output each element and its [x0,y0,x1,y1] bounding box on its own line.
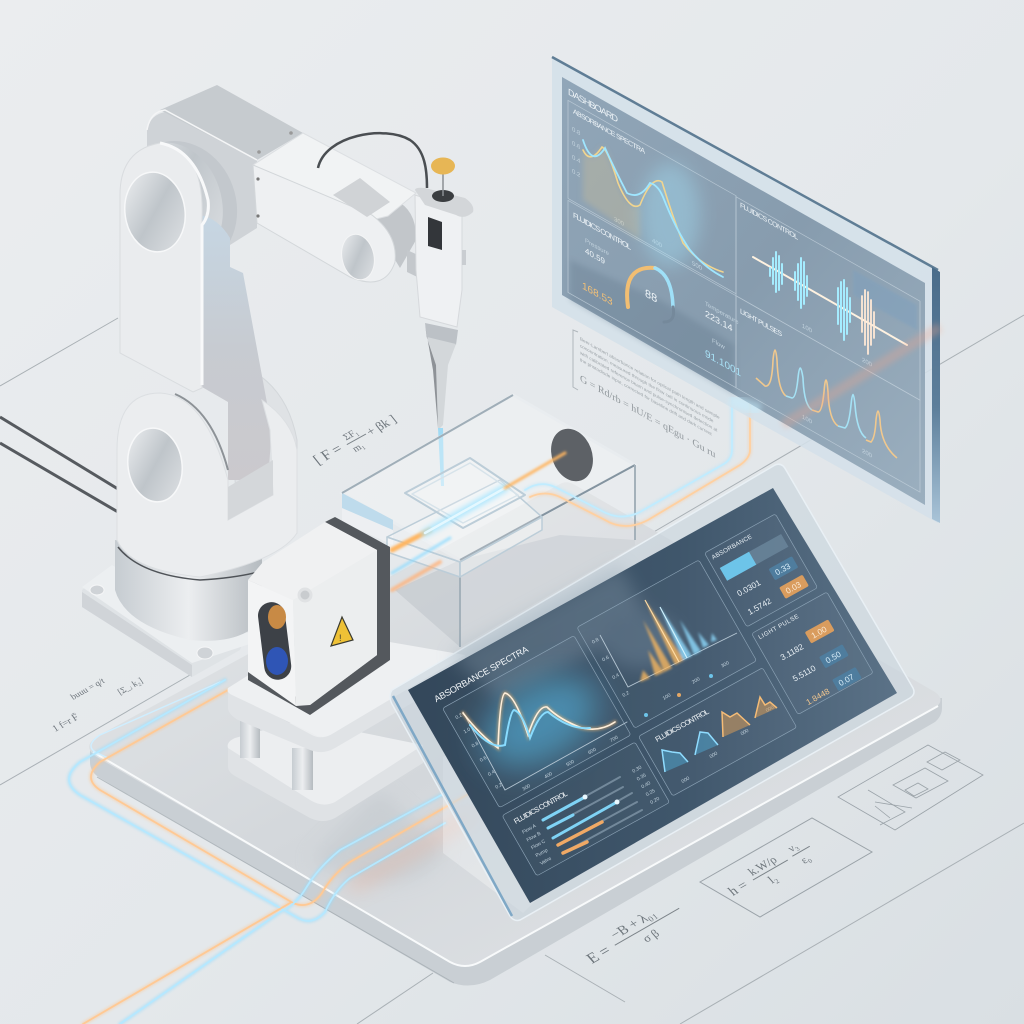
monitor text labels: 500 [692,260,702,273]
text block: floating notes behind monitor: G = Rd/rb = hU/E = qEgu · Gu ru [580,373,716,461]
formula: force equation: ΣF₁ [341,427,361,443]
monitor text labels: 100 [802,414,812,426]
robot joint seam [118,547,258,580]
robot signal cable [318,133,427,188]
robot rear dome [225,360,297,540]
tablet text labels: 000 [740,728,750,737]
formula box: wavelength equation: ν₃ [786,841,801,854]
formula: bottom energy equation: −B + λ₀₁ [608,907,660,942]
text block: floating notes behind monitor: Beer-Lambert absorbance relation for optical path length and sample [580,336,720,421]
cuvette tray [387,458,542,577]
tablet text labels: 0.8 [471,741,480,749]
monitor panel grid [568,100,920,492]
tablet text labels: 0.8 [591,637,600,645]
tablet text labels: Flow A [521,823,538,836]
tablet text labels: 5.5110 [791,664,818,683]
formula: left floor notes: 1 f=r F̄ [50,711,81,734]
blue inlet channel [120,793,445,1024]
robot yoke shadow arc [175,394,228,470]
cables to robot [0,417,118,512]
formula: bottom energy equation: σ β [639,927,662,945]
monitor text labels: 0.4 [572,154,581,165]
monitor text labels: 200 [862,357,872,369]
monitor text labels: 91.1001 [705,348,741,379]
base plate [89,482,942,986]
tablet glass frame [390,464,914,920]
tablet plateau charts [662,697,777,772]
formula: bottom energy equation [578,896,690,973]
monitor status box [853,270,917,330]
tablet absorbance chart [463,693,627,790]
monitor signal waveform [753,252,907,354]
robot pedestal cylinder [115,540,262,641]
text block: floating notes behind monitor: concentration, measured through the flow cell in continuous mode [580,343,714,425]
blue corner loop [91,682,220,758]
formula: force equation: + βk ] [363,412,399,439]
channel glows [69,680,470,1024]
text block: floating notes behind monitor: the photodiode input, corrected for baseline drift and dark current [580,357,712,438]
tablet spectrum bars [600,600,737,717]
monitor text labels: 300 [614,216,624,228]
sensor pedestal [228,630,465,821]
monitor glass frame [552,57,938,523]
tablet text labels: LIGHT PULSE [757,613,800,641]
formula: bottom energy equation: E = [583,943,614,967]
monitor absorbance chart [583,140,723,277]
formula: force equation [308,409,404,473]
formula box: wavelength equation: l₂ [765,872,781,886]
tablet text labels: 0.20 [649,796,661,806]
monitor light glow streak [730,327,940,425]
tablet flow sliders [543,777,642,853]
monitor text labels: 400 [652,237,662,250]
sensor right face [293,550,377,706]
tablet text labels: 1.8448 [805,687,832,707]
pipette [407,158,473,486]
tablet text labels: 700 [609,735,620,744]
monitor text labels: 168.53 [582,280,613,308]
formula: left floor notes [50,675,145,734]
light beam through sample [392,453,565,590]
tablet text labels: 0.25 [645,788,657,798]
sensor lens window [256,601,293,681]
monitor text labels: LIGHT PULSES [740,307,782,339]
formula box: wavelength equation: h = [726,879,752,899]
laser sensor module [248,517,390,715]
tablet text labels: 0.40 [640,780,652,790]
upper dashboard monitor [552,57,940,523]
tablet left blue edge [393,696,512,916]
schematic: circuit diagram [838,745,983,830]
tablet text labels: 0.6 [601,655,610,663]
monitor text labels: FLUIDICS CONTROL [573,211,631,252]
monitor light pulses [756,350,897,458]
icon: laser warning [331,617,353,646]
glass cuvette enclosure [342,395,750,647]
robot shoulder housing [105,85,303,285]
tablet text labels: 300 [521,783,532,792]
tablet text labels: 300 [720,660,731,669]
tablet screen [408,488,897,903]
robot lower joint cap [123,425,187,505]
tablet text labels: Flow C [530,838,547,851]
monitor text labels [568,87,872,460]
monitor text labels: 223.14 [705,309,733,335]
monitor text labels: Temperature [705,301,739,326]
monitor text labels: 0.2 [572,168,581,179]
robot yoke recess [228,460,273,520]
enclosure back and shadow [395,535,635,647]
monitor text labels: 100 [802,323,812,335]
tablet text labels: 200 [691,676,701,686]
monitor edges [552,57,938,270]
channels to upper monitor [525,397,750,526]
tablet text labels: 1.0 [463,727,472,735]
tablet text labels: 0.33 [774,561,793,577]
robot main link [120,143,271,480]
orange inlet channel [83,903,290,1024]
tablet text labels: 0.4 [487,769,496,778]
formula: left floor notes: [Σ_ᵢ k₂] [116,675,145,697]
floor formulas and schematics [50,330,983,973]
formula box: wavelength equation [700,818,872,917]
tablet text labels: 0.0301 [736,578,763,598]
robot arm [82,85,473,677]
tablet text labels: Valve [539,856,553,867]
tablet text labels [432,510,868,872]
sensor front face [248,580,296,706]
formula: force equation: m₁ [350,441,367,455]
sensor dark housing [248,517,390,715]
robot flange [82,565,262,677]
tablet absorbance meter [720,534,788,581]
monitor text labels: 40.59 [585,246,605,266]
orange loop channel [91,690,470,905]
monitor text labels: DASHBOARD [568,87,618,126]
formula: left floor notes: buuu = q/t [69,675,107,702]
tablet text labels: 0.50 [824,650,843,665]
monitor text labels: ABSORBANCE SPECTRA [573,107,646,156]
tablet panel grid [437,511,881,876]
absorbance glow [467,658,613,786]
tablet text labels: ABSORBANCE [711,533,753,561]
detector [544,423,600,487]
dispensed droplet beam [438,428,444,486]
fluid and light channels on plate [69,680,470,1024]
tablet text labels: 600 [587,747,598,756]
text block: floating notes behind monitor [573,330,720,461]
monitor text labels: Pressure [585,237,609,258]
tablet text labels: 0.6 [479,755,488,764]
tablet text labels: 0.30 [631,765,643,775]
robot forearm [253,131,416,283]
tablet reflection patches [450,565,680,700]
sensor top face [248,522,377,600]
tablet text labels: 0.35 [636,772,648,782]
monitor text labels: 0.6 [572,140,581,151]
monitor dark band [570,260,735,395]
tablet text labels: 500 [565,759,576,768]
tablet text labels: Flow B [526,831,543,843]
tablet text labels: Pump [535,847,549,859]
tablet text labels: 000 [709,751,719,760]
tablet text labels: 1.5742 [746,596,773,617]
icon: laser warning: ! [339,633,342,643]
tablet text labels: ABSORBANCE SPECTRA [432,644,531,704]
tablet text labels: 0.2 [494,782,504,791]
tablet text labels: 0.03 [784,580,803,596]
lower touchscreen tablet [390,464,914,920]
blue loop channel [69,680,445,921]
text block: floating notes behind monitor: with calibrated reference beam and pulse-synchronised detection at [580,350,718,434]
monitor text labels: 200 [862,448,872,460]
tablet text labels: FLUIDICS CONTROL [512,789,569,826]
robot lower yoke [117,393,297,577]
monitor text labels: Flow [712,337,725,351]
tablet text labels: 0.4 [611,672,621,681]
tablet text labels: 1.00 [810,625,829,640]
monitor fluid gauge [627,268,674,322]
tablet stand [443,700,640,913]
monitor screen [562,77,925,505]
sensor screw [299,589,311,601]
monitor text labels: 0.8 [572,126,581,137]
tablet text labels: 0.2 [455,712,464,721]
tablet text labels: 0.07 [837,672,856,688]
monitor text labels: FLUIDICS CONTROL [740,201,798,242]
tablet text labels: FLUIDICS CONTROL [654,707,711,744]
robot upper joint cap [120,168,190,256]
formula box: wavelength equation: k.W/ρ [745,853,780,878]
tablet text labels: 000 [681,776,691,785]
tablet text labels: 3.1182 [779,642,806,662]
formula: force equation: [ F = [311,442,346,468]
tablet text labels: 100 [662,692,672,702]
formula box: wavelength equation: ε₀ [798,853,814,866]
monitor text labels: 88 [645,286,658,306]
tablet text labels: 400 [543,771,554,780]
tablet text labels: 000 [765,705,775,714]
tablet text labels: 0.2 [622,690,631,699]
